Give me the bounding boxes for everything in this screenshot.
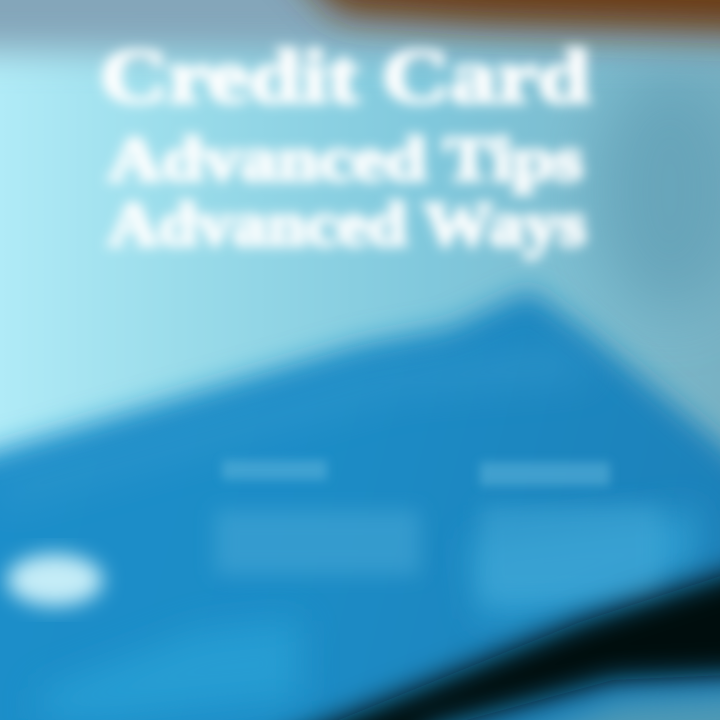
card label: middle	[222, 460, 327, 480]
title line 2: Advanced Tips	[108, 126, 583, 194]
card right glow	[470, 510, 700, 620]
card label: right	[480, 462, 610, 486]
card text block: middle	[215, 510, 420, 575]
title text	[100, 35, 590, 259]
title line 1: Credit Card	[100, 35, 590, 119]
card lower glow	[40, 620, 300, 720]
card oval logo	[7, 554, 103, 606]
card text block: right	[480, 505, 660, 600]
title line 3: Advanced Ways	[108, 191, 586, 259]
card highlight band	[0, 345, 600, 510]
